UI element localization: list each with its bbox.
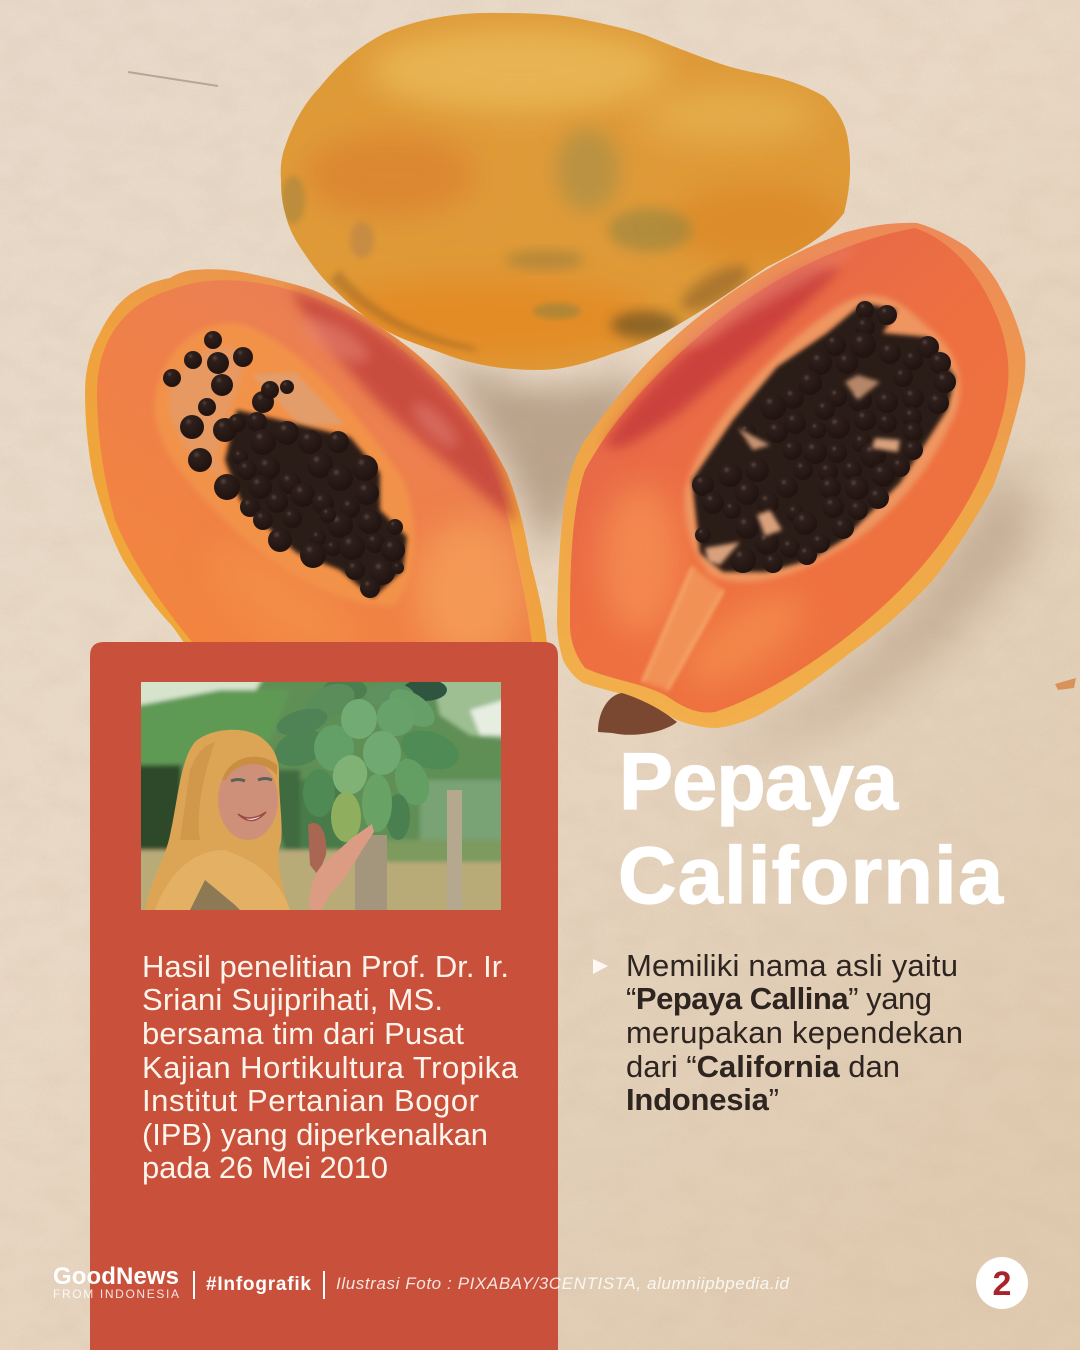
seeds: left cavity: [163, 331, 405, 598]
hand raised: [308, 823, 374, 910]
papaya stem: [598, 693, 677, 735]
photo: whole papaya: [280, 12, 850, 370]
page number badge: [976, 1257, 1028, 1309]
page number badge: 2: [993, 1265, 1011, 1303]
text: origin of the name: merupakan kependekan: [626, 1015, 963, 1050]
title: California: [618, 831, 1004, 921]
text: researcher description: Institut Pertanian Bogor: [142, 1083, 479, 1118]
pulp bits: [705, 375, 900, 565]
text: researcher description: pada 26 Mei 2010: [142, 1150, 388, 1185]
title: Pepaya: [619, 737, 899, 827]
cavity surround: [154, 323, 414, 605]
bullet arrow: [593, 959, 608, 974]
text: origin of the name: [626, 948, 963, 1117]
text: researcher description: Hasil penelitian Prof. Dr. Ir.: [142, 949, 509, 984]
tree trunks: [355, 790, 462, 910]
dark seed mass: [692, 303, 955, 572]
logo: GoodNews from Indonesia: GoodNews: [53, 1263, 179, 1290]
seeds: right cavity: [692, 301, 956, 573]
text: researcher description: (IPB) yang diperkenalkan: [142, 1117, 488, 1152]
dark seed mass: [225, 410, 407, 598]
shadows under fruit: [440, 350, 1040, 752]
groove below cavity: [643, 567, 723, 690]
red streak on left flesh: [290, 290, 515, 525]
text: researcher description: Kajian Hortikultura Tropika: [142, 1050, 519, 1085]
face: [218, 757, 278, 840]
logo: GoodNews from Indonesia: FROM INDONESIA: [53, 1287, 179, 1301]
photo: researcher with papaya tree: [141, 682, 501, 910]
text: researcher description: Sriani Sujiprihati, MS.: [142, 982, 443, 1017]
text: researcher description: bersama tim dari Pusat: [142, 1016, 464, 1051]
panel: red profile card: [90, 642, 558, 1350]
text: origin of the name: Indonesia”: [626, 1082, 779, 1117]
red streak on right flesh: [605, 266, 840, 447]
text: researcher description: [142, 949, 519, 1185]
photo: right papaya half: [550, 215, 1040, 745]
text: origin of the name: “Pepaya Callina” yang: [626, 981, 932, 1016]
photo credit: Ilustrasi Foto : PIXABAY/3CENTISTA, alumniipbpedia.id: [336, 1274, 790, 1293]
cavity surround: [684, 295, 960, 582]
papaya cluster: [270, 677, 464, 842]
photo: left papaya half: [85, 269, 547, 642]
title: [618, 737, 1004, 921]
text: origin of the name: Memiliki nama asli yaitu: [626, 948, 958, 983]
hashtag: #Infografik: [206, 1274, 311, 1295]
batik blouse: [190, 880, 240, 910]
hijab: [145, 730, 290, 910]
text: origin of the name: dari “California dan: [626, 1049, 900, 1084]
footer: [53, 1263, 790, 1301]
